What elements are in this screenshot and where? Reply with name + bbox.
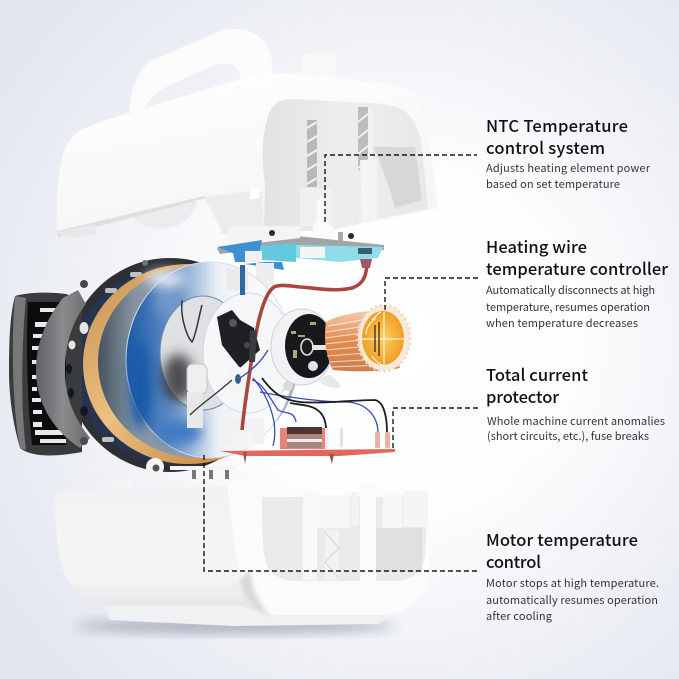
upper white housing with handle — [57, 29, 438, 240]
callout: motor temperature control: automatically resumes operation — [486, 592, 658, 608]
wiring — [190, 259, 387, 446]
white connector on board — [233, 432, 253, 448]
housing foot — [103, 600, 400, 626]
dark housing — [66, 258, 274, 472]
blue disc — [126, 262, 294, 458]
copper coil — [325, 310, 400, 371]
lower white housing — [55, 477, 430, 633]
rear round wall — [133, 190, 300, 234]
blue wires — [240, 350, 378, 446]
line: motor — [204, 455, 478, 571]
callout: total current protector: Total current — [486, 362, 588, 386]
callout: total current protector: protector — [486, 384, 559, 408]
line: heating wire — [385, 278, 478, 310]
callout: NTC temperature control: control system — [486, 135, 605, 159]
inner blue grey wall — [98, 266, 298, 458]
cavity interior — [262, 497, 428, 581]
callout: total current protector: (short circuits, etc.), fuse breaks — [487, 428, 649, 444]
callout: motor temperature control — [486, 527, 659, 624]
black control board — [285, 314, 333, 378]
callout: heating wire temperature controller: Heating wire — [486, 234, 587, 258]
callout: heating wire temperature controller: temperature controller — [486, 256, 668, 280]
base shadow — [75, 619, 395, 633]
bottom rim — [57, 196, 206, 237]
callout: NTC temperature control: NTC Temperature — [486, 113, 628, 137]
callout: NTC temperature control — [486, 113, 651, 192]
orange heater end — [362, 311, 404, 365]
speckled inner housing — [160, 296, 246, 410]
screw holes on frame — [68, 322, 88, 350]
line: NTC — [325, 155, 477, 222]
housing shell left — [55, 485, 266, 612]
white end disc — [203, 293, 293, 413]
clip tabs — [110, 477, 190, 488]
callout: heating wire temperature controller: Automatically disconnects at high — [486, 282, 655, 298]
callout: heating wire temperature controller: temperature, resumes operation — [486, 299, 650, 315]
housing shell — [57, 73, 438, 236]
blue top circuit board — [217, 226, 384, 290]
rear grill — [9, 293, 82, 455]
callout: NTC temperature control: Adjusts heating element power — [486, 160, 651, 176]
copper ring — [83, 264, 293, 464]
callout: motor temperature control: Motor stops at high temperature. — [486, 575, 659, 591]
callout: motor temperature control: control — [486, 549, 541, 573]
callout: total current protector — [486, 362, 665, 444]
callout: total current protector: Whole machine current anomalies — [487, 413, 665, 429]
red lower circuit board — [220, 427, 395, 464]
cavity interior — [263, 99, 428, 232]
callout: motor temperature control: after cooling — [486, 608, 553, 624]
callout: NTC temperature control: based on set temperature — [486, 176, 620, 192]
callout: heating wire temperature controller: when temperature decreases — [486, 315, 638, 331]
motor assembly — [9, 258, 298, 472]
heating element — [271, 305, 410, 391]
line: total current — [393, 408, 478, 448]
callout lines — [204, 155, 478, 571]
callout: motor temperature control: Motor temperature — [486, 527, 638, 551]
handle — [129, 29, 272, 112]
white cooling fins — [358, 305, 410, 371]
callout: heating wire temperature controller — [486, 234, 668, 331]
heater white cylinder — [271, 309, 333, 385]
cavity columns — [303, 483, 428, 581]
cable grommets — [187, 364, 207, 394]
knob — [302, 53, 336, 78]
black wires — [262, 378, 387, 433]
housing frame right — [227, 484, 430, 615]
motor mount lug — [146, 458, 235, 479]
grey ring — [36, 290, 90, 448]
red ribbon cable — [242, 260, 367, 430]
